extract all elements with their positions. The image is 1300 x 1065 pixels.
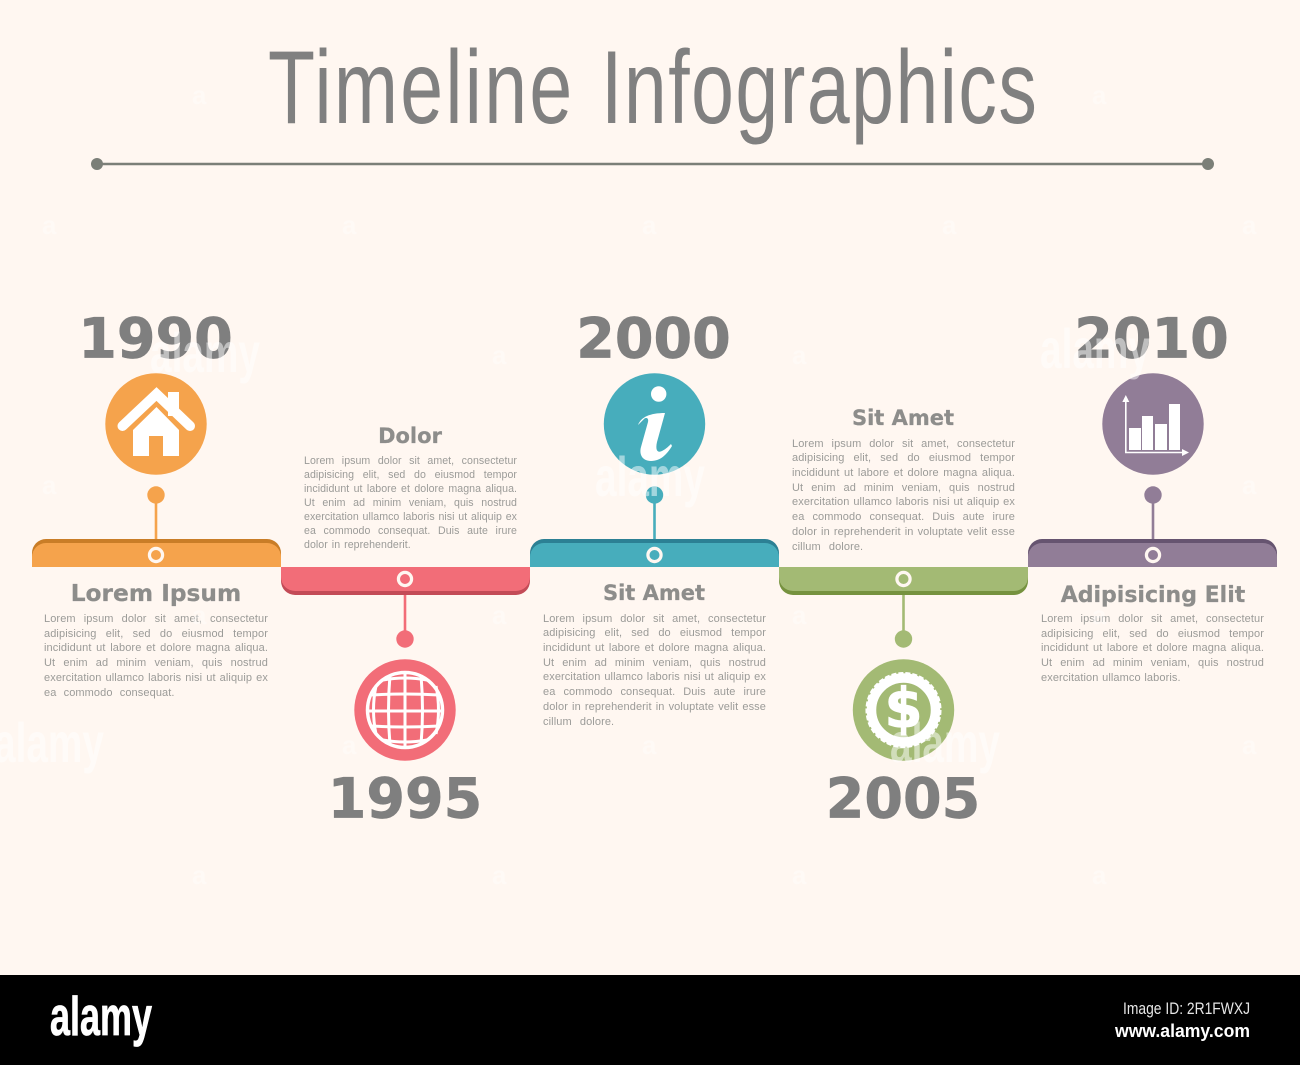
text block: Lorem Ipsum: [44, 613, 268, 699]
text block: Sit Amet (2000): cillum dolore.: [543, 716, 614, 728]
icon: globe: [354, 659, 456, 761]
watermarks: a: [1092, 860, 1107, 890]
timeline item: 2005: [779, 406, 1028, 832]
watermarks: a: [1092, 80, 1107, 110]
connector: [646, 486, 663, 545]
bar segment: [32, 539, 281, 567]
text block: Adipisicing Elit: adipisicing elit, sed do eiusmod tempor: [1041, 628, 1264, 640]
text block: Sit Amet (2005): adipisicing elit, sed do eiusmod tempor: [792, 452, 1015, 464]
watermarks: a: [342, 730, 357, 760]
text block: Lorem Ipsum: incididunt ut labore et dolore magna aliqua.: [44, 642, 268, 654]
watermarks: [0, 80, 1257, 890]
text block: Dolor: ea commodo consequat. Duis aute irure: [304, 525, 517, 537]
text block: Sit Amet (2000): dolor in reprehenderit in voluptate velit esse: [543, 701, 766, 713]
watermarks: a: [642, 730, 657, 760]
watermarks: alamy: [1040, 317, 1150, 380]
watermarks: a: [792, 860, 807, 890]
year 2010: 2010: [1074, 306, 1229, 372]
timeline item: 2000: [530, 306, 779, 605]
watermarks: a: [1242, 730, 1257, 760]
watermarks: alamy: [150, 321, 260, 384]
text block: Sit Amet (2005): cillum dolore.: [792, 541, 863, 553]
text block: Adipisicing Elit: exercitation ullamco laboris.: [1041, 672, 1181, 684]
year 1990: 1990: [78, 306, 233, 372]
bar segment: [779, 567, 1028, 595]
watermarks: alamy: [890, 711, 1000, 774]
watermarks: a: [792, 340, 807, 370]
text block: Dolor: Ut enim ad minim veniam, quis nostrud: [304, 497, 517, 509]
text block: Lorem Ipsum: ea commodo consequat.: [44, 687, 175, 699]
image id: Image ID: 2R1FWXJ: [1123, 999, 1250, 1018]
text block: Sit Amet (2005): exercitation ullamco laboris nisi ut aliquip ex: [792, 496, 1015, 508]
text block: Sit Amet (2005): [792, 438, 1015, 553]
text block: Sit Amet (2000): ea commodo consequat. Duis aute irure: [543, 686, 766, 698]
watermarks: a: [492, 600, 507, 630]
year 1995: 1995: [328, 766, 482, 832]
text block: Dolor: adipisicing elit, sed do eiusmod tempor: [304, 469, 517, 481]
text block: Sit Amet (2005): incididunt ut labore et dolore magna aliqua.: [792, 467, 1015, 479]
text block: Lorem Ipsum: Lorem ipsum dolor sit amet, consectetur: [44, 613, 268, 625]
bar segment: [281, 567, 530, 595]
year 2005: 2005: [826, 766, 980, 832]
text block: Dolor: Lorem ipsum dolor sit amet, consectetur: [304, 454, 517, 466]
watermarks: a: [1092, 600, 1107, 630]
heading: Sit Amet: [603, 581, 705, 605]
text block: Adipisicing Elit: [1041, 613, 1264, 684]
icon: bar chart: [1102, 373, 1204, 475]
watermarks: a: [342, 210, 357, 240]
watermarks: a: [192, 860, 207, 890]
text block: Dolor: dolor in reprehenderit.: [304, 539, 411, 551]
title: Infographics: [601, 30, 1037, 146]
text block: Lorem Ipsum: exercitation ullamco laboris nisi ut aliquip ex: [44, 672, 268, 684]
icon: house: [105, 373, 207, 475]
icon: dollar coin: [853, 659, 954, 761]
text block: Sit Amet (2005): dolor in reprehenderit in voluptate velit esse: [792, 526, 1015, 538]
bar segment: [530, 539, 779, 567]
text block: Dolor: incididunt ut labore et dolore magna aliqua.: [304, 483, 517, 495]
watermarks: a: [642, 210, 657, 240]
heading: Sit Amet: [852, 406, 954, 430]
connector: [396, 585, 414, 648]
text block: Sit Amet (2000): incididunt ut labore et dolore magna aliqua.: [543, 642, 766, 654]
watermarks: a: [192, 80, 207, 110]
text block: Adipisicing Elit: incididunt ut labore et dolore magna aliqua.: [1041, 642, 1264, 654]
watermarks: a: [192, 600, 207, 630]
icon: dollar coin: $: [885, 677, 922, 740]
timeline item: 1990: [32, 306, 281, 607]
text block: Adipisicing Elit: Lorem ipsum dolor sit amet, consectetur: [1041, 613, 1264, 625]
watermarks: a: [492, 340, 507, 370]
heading: Dolor: [378, 424, 443, 448]
text block: Sit Amet (2000): [543, 612, 766, 728]
text block: Lorem Ipsum: adipisicing elit, sed do eiusmod tempor: [44, 628, 268, 640]
text block: Lorem Ipsum: Ut enim ad minim veniam, quis nostrud: [44, 657, 268, 669]
title divider: [91, 158, 1214, 170]
footer band: [0, 975, 1300, 1065]
text block: Sit Amet (2005): Ut enim ad minim veniam, quis nostrud: [792, 482, 1015, 494]
text block: Adipisicing Elit: Ut enim ad minim veniam, quis nostrud: [1041, 657, 1264, 669]
year 2000: 2000: [576, 306, 731, 372]
watermarks: a: [1242, 470, 1257, 500]
connector: [895, 585, 912, 648]
connector: [147, 486, 165, 545]
footer logo: alamy: [50, 985, 152, 1047]
watermarks: a: [42, 210, 57, 240]
text block: Dolor: [304, 454, 517, 551]
text block: Sit Amet (2005): ea commodo consequat. Duis aute irure: [792, 511, 1015, 523]
text block: Sit Amet (2000): adipisicing elit, sed do eiusmod tempor: [543, 627, 766, 639]
watermarks: a: [42, 470, 57, 500]
text block: Dolor: exercitation ullamco laboris nisi ut aliquip ex: [304, 511, 517, 523]
watermarks: a: [942, 210, 957, 240]
text block: Sit Amet (2005): Lorem ipsum dolor sit amet, consectetur: [792, 438, 1015, 450]
icon: info: [604, 373, 705, 475]
timeline item: 1995: [281, 424, 530, 832]
bar segment: [1028, 539, 1277, 567]
watermarks: a: [492, 860, 507, 890]
text block: Sit Amet (2000): exercitation ullamco laboris nisi ut aliquip ex: [543, 671, 766, 683]
watermarks: a: [792, 600, 807, 630]
title: [268, 30, 1037, 146]
timeline item: 2010: [1028, 306, 1277, 608]
text block: Sit Amet (2000): Ut enim ad minim veniam, quis nostrud: [543, 657, 766, 669]
watermarks: alamy: [595, 445, 705, 508]
connector: [1144, 486, 1162, 545]
text block: Sit Amet (2000): Lorem ipsum dolor sit amet, consectetur: [543, 612, 766, 624]
watermarks: a: [1242, 210, 1257, 240]
heading: Adipisicing Elit: [1061, 583, 1246, 608]
heading: Lorem Ipsum: [71, 580, 241, 607]
title: Timeline: [268, 30, 572, 146]
website: www.alamy.com: [1114, 1021, 1250, 1041]
